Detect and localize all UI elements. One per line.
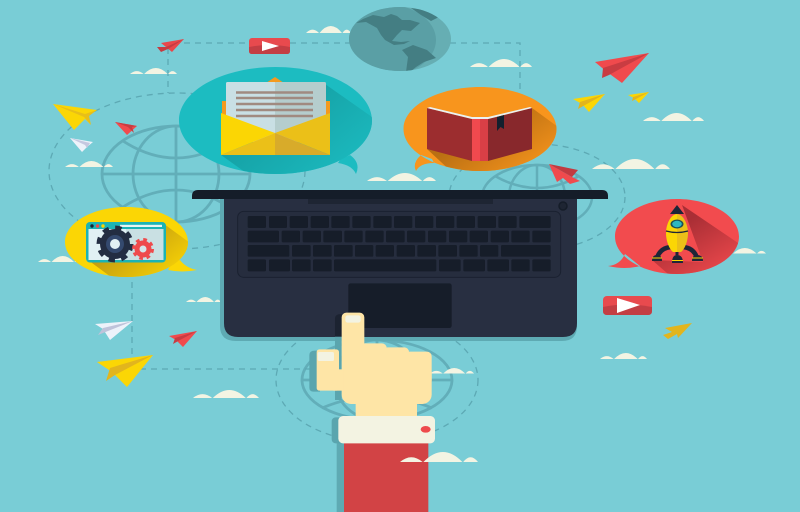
hand pointing at trackpad bbox=[309, 313, 435, 512]
keyboard bbox=[238, 211, 561, 328]
icon: paper plane red near book bbox=[549, 164, 580, 184]
laptop lid edge bbox=[192, 190, 608, 199]
panel: book speech bubble bbox=[404, 87, 558, 175]
long shadow: envelope bbox=[221, 84, 375, 180]
globe: left bbox=[102, 126, 250, 222]
hinge bbox=[308, 199, 493, 204]
icon: paper plane yellow small right bbox=[628, 92, 649, 103]
icon: browser window with gears bbox=[86, 222, 166, 262]
index fingernail bbox=[345, 315, 361, 323]
cloud over sleeve bbox=[400, 452, 478, 462]
icon: large gear bbox=[100, 228, 130, 260]
long shadow: book bbox=[427, 108, 558, 175]
bubble: yellow bbox=[65, 207, 197, 277]
cuff bbox=[338, 416, 435, 443]
hand shadow bbox=[309, 337, 342, 400]
icon: earth globe bbox=[349, 7, 451, 71]
finger shadow on laptop bbox=[335, 314, 342, 337]
laptop bbox=[192, 190, 608, 341]
laptop body bbox=[224, 199, 577, 337]
cuff button bbox=[421, 426, 431, 433]
icon: paper plane gold bbox=[663, 323, 692, 339]
globe: right bbox=[482, 165, 592, 229]
letter page bbox=[226, 82, 326, 142]
camera bbox=[559, 202, 567, 210]
icon: paper plane yellow lower bbox=[97, 355, 153, 387]
long shadow: window bbox=[92, 226, 188, 277]
trackpad bbox=[348, 283, 452, 328]
icon: paper plane white lower bbox=[95, 321, 133, 340]
icon: play button right bbox=[603, 296, 652, 315]
icon: paper plane red large bbox=[595, 53, 649, 83]
dashed connector paths bbox=[49, 43, 625, 442]
icon: envelope bbox=[221, 77, 330, 155]
panel: rocket speech bubble bbox=[608, 199, 741, 280]
laptop shadow bbox=[220, 199, 577, 341]
panel: settings speech bubble bbox=[65, 207, 197, 280]
icon: paper plane red lower bbox=[169, 331, 197, 347]
thumbnail bbox=[318, 352, 334, 361]
bubble: teal bbox=[179, 67, 372, 174]
icon: rocket bbox=[652, 205, 703, 263]
icon: paper plane yellow left bbox=[53, 104, 97, 130]
cuff shadow bbox=[332, 417, 345, 443]
icon: play button top bbox=[249, 38, 290, 54]
hand fingers and palm bbox=[317, 313, 432, 417]
sleeve shadow bbox=[337, 442, 345, 512]
icon: paper plane red left bbox=[115, 122, 137, 135]
icon: paper plane yellow right bbox=[573, 94, 605, 112]
icon: paper plane red top left bbox=[157, 39, 184, 52]
bubble: orange bbox=[404, 87, 556, 171]
panel: email speech bubble bbox=[179, 67, 375, 180]
icon: paper plane white left bbox=[70, 138, 93, 152]
long shadow: rocket bbox=[653, 205, 738, 274]
globe: bottom bbox=[302, 340, 452, 420]
icon: open book bbox=[427, 107, 532, 161]
clouds bbox=[38, 26, 766, 398]
bubble: red bbox=[608, 199, 739, 274]
icon: small gear bbox=[134, 240, 152, 258]
sleeve bbox=[344, 443, 428, 512]
